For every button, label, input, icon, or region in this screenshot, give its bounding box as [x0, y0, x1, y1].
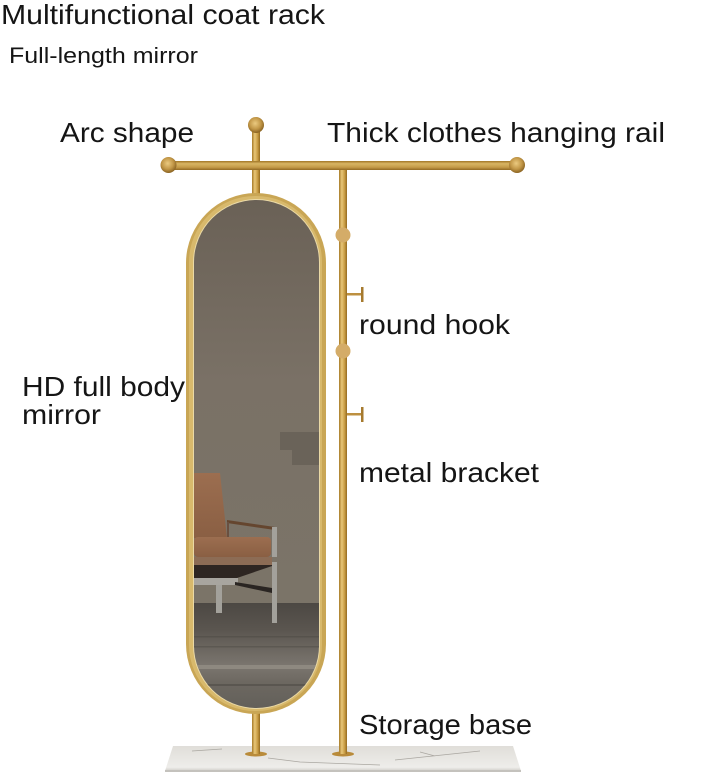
top finial [248, 117, 264, 133]
round hook lower [336, 344, 350, 358]
upright post with hooks [336, 167, 364, 754]
hanging rail [160, 157, 525, 173]
label: HD full body mirror: mirror [22, 399, 101, 430]
label: arc shape: Arc shape [60, 117, 194, 148]
arc mirror [186, 193, 326, 714]
label: HD full body mirror: HD full body [22, 371, 185, 402]
label: storage base: Storage base [359, 709, 532, 740]
round hook upper [336, 228, 350, 242]
upper mirror post [252, 128, 260, 194]
mirror frame [186, 193, 326, 714]
mirror reflection [194, 200, 319, 708]
hook arm lower [347, 407, 364, 422]
label: metal bracket: metal bracket [359, 457, 539, 488]
chair [194, 473, 277, 623]
label: round hook: round hook [359, 309, 511, 340]
subtitle: Full-length mirror [9, 43, 198, 68]
label: HD full body mirror [22, 371, 185, 430]
hook arm upper [347, 287, 364, 302]
label: thick clothes hanging rail: Thick clothes hanging rail [327, 117, 665, 148]
lower mirror post [252, 712, 260, 754]
storage base: marble slab [165, 746, 521, 772]
